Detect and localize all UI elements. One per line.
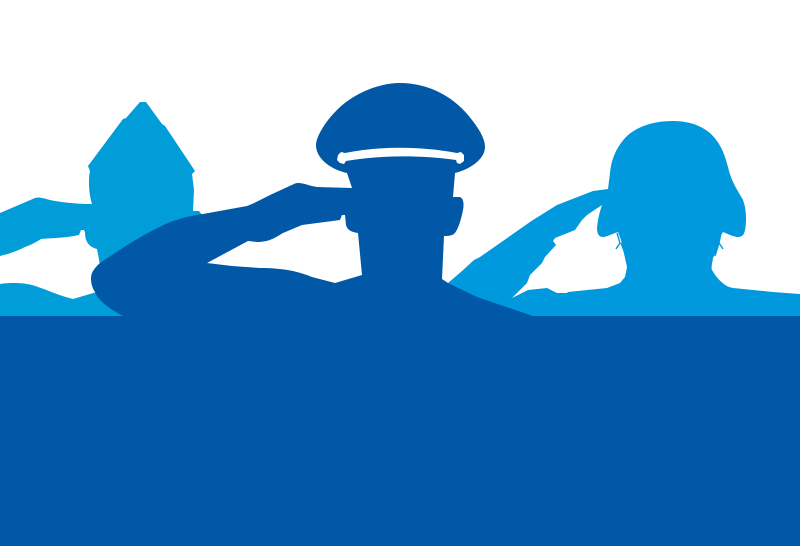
base block: [0, 316, 800, 546]
hat band highlight: [337, 148, 464, 164]
helmet straps: [616, 233, 723, 256]
figure: right soldier silhouette: [448, 121, 800, 316]
figure: left sailor silhouette: [0, 102, 203, 316]
figure: center officer silhouette: [91, 83, 533, 316]
